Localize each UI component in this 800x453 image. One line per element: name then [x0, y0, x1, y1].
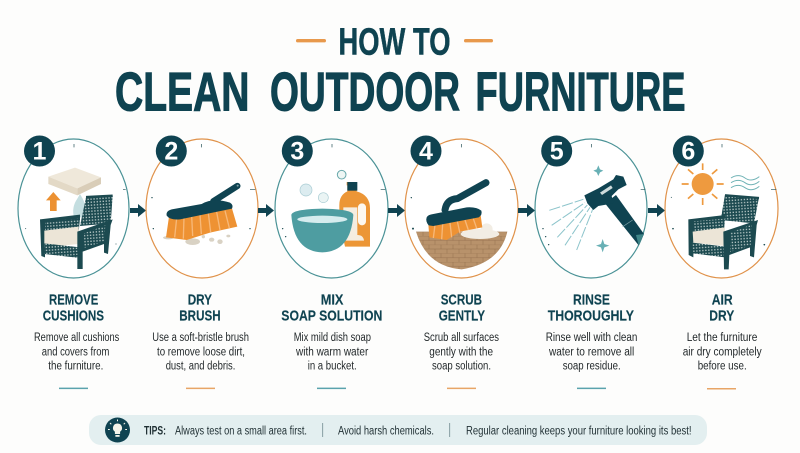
step 4 heading: GENTLY: [439, 308, 485, 325]
step 5 ring: [535, 139, 647, 278]
step 3 heading: MIX: [321, 291, 343, 308]
title line: clean outdoor furniture: [115, 60, 686, 122]
arrow: step 4 to 5: [518, 204, 535, 217]
step 1 heading: REMOVE: [49, 291, 98, 308]
step 6 ring: [665, 139, 778, 278]
step 2 heading: BRUSH: [179, 308, 221, 325]
icon: light bulb: [105, 418, 130, 442]
step 2 description: [152, 332, 249, 372]
title line: clean outdoor furniture: FURNITURE: [476, 60, 686, 122]
step 4 description: gently with the: [429, 346, 493, 358]
title line: how to: HOW TO: [338, 22, 450, 64]
step 1 ring: [18, 139, 129, 278]
icon: spray nozzle with water and sparkles: [542, 144, 645, 252]
icon: chair with cushion lifted: [25, 144, 126, 269]
step 1 description: the furniture.: [48, 360, 103, 372]
step 4 badge: 4: [419, 138, 433, 166]
step 5 description: [546, 332, 637, 372]
arrow: step 5 to 6: [648, 204, 665, 217]
step 2 ring: [146, 139, 258, 278]
step 2 description: dust, and debris.: [166, 360, 235, 372]
step 5 description: Rinse well with clean: [546, 332, 637, 344]
tip 3: Regular cleaning keeps your furniture looking its best!: [466, 426, 692, 438]
step 6 description: Let the furniture: [687, 332, 757, 344]
panel: step 5 rinse thoroughly: [535, 136, 647, 389]
step 6 heading: [709, 291, 734, 325]
step 5 badge: [541, 136, 572, 166]
panel: step 1 remove cushions: [18, 136, 129, 389]
step 2 heading: [179, 291, 221, 325]
step 4 badge: [410, 136, 442, 166]
icon: bowl, bubbles and soap bottle: [282, 144, 385, 252]
step 1 badge: [24, 136, 55, 166]
step 5 heading: RINSE: [573, 291, 610, 308]
step 3 badge: 3: [290, 138, 304, 166]
step 2 description: to remove loose dirt,: [157, 346, 245, 358]
step 2 badge: 2: [164, 138, 178, 166]
step 6 heading: AIR: [712, 291, 733, 308]
step 3 description: Mix mild dish soap: [294, 332, 371, 344]
panel: step 6 air dry: [665, 136, 778, 390]
step 2 heading: DRY: [188, 291, 212, 308]
step 6 description: before use.: [698, 360, 747, 372]
step 1 description: [34, 332, 119, 372]
arrow: step 3 to 4: [388, 204, 405, 217]
step 3 description: in a bucket.: [308, 360, 357, 372]
tip 2: Avoid harsh chemicals.: [338, 426, 434, 438]
step 1 heading: [43, 291, 104, 325]
step 3 ring: [275, 139, 388, 278]
tips bar: [89, 415, 707, 445]
step 2 description: Use a soft-bristle brush: [152, 332, 249, 344]
step 4 heading: SCRUB: [441, 291, 482, 308]
step 1 description: and covers from: [42, 346, 109, 358]
tip 1: Always test on a small area first.: [175, 426, 307, 438]
panel: step 3 mix soap solution: [275, 136, 388, 389]
step 3 description: [294, 332, 371, 372]
step 3 heading: SOAP SOLUTION: [281, 308, 382, 325]
step 1 badge: 1: [33, 138, 47, 166]
arrow: step 1 to 2: [130, 204, 146, 217]
title line: clean outdoor furniture: CLEAN: [115, 60, 250, 122]
icon: scrub brush on brick surface: [411, 144, 515, 269]
step 6 badge: [673, 136, 704, 166]
panel: step 4 scrub gently: [405, 136, 518, 389]
step 5 description: soap residue.: [563, 360, 621, 372]
step 3 heading: [281, 291, 382, 325]
step 4 description: soap solution.: [432, 360, 491, 372]
step 3 badge: [282, 136, 313, 166]
step 5 heading: [548, 291, 634, 325]
step 5 badge: 5: [550, 138, 564, 166]
step 3 description: with warm water: [295, 346, 368, 358]
title: [115, 22, 686, 122]
step 6 description: [683, 332, 762, 372]
step 1 heading: CUSHIONS: [43, 308, 104, 325]
icon: dry brush with dust: [151, 144, 255, 245]
step 4 description: [424, 332, 499, 372]
arrow: step 2 to 3: [258, 204, 274, 217]
tips label: TIPS:: [144, 426, 166, 438]
title line: clean outdoor furniture: OUTDOOR: [270, 60, 460, 122]
step 4 ring: [405, 139, 518, 278]
step 6 badge: 6: [681, 138, 695, 166]
panel: step 2 dry brush: [146, 136, 258, 389]
icon: sun, breeze and chair: [671, 144, 776, 269]
step 6 heading: DRY: [709, 308, 734, 325]
step 4 heading: [439, 291, 485, 325]
step 6 description: air dry completely: [683, 346, 762, 358]
step 1 description: Remove all cushions: [34, 332, 119, 344]
step 5 description: water to remove all: [548, 346, 634, 358]
step 5 heading: THOROUGHLY: [548, 308, 634, 325]
step 4 description: Scrub all surfaces: [424, 332, 499, 344]
step 2 badge: [156, 136, 187, 166]
